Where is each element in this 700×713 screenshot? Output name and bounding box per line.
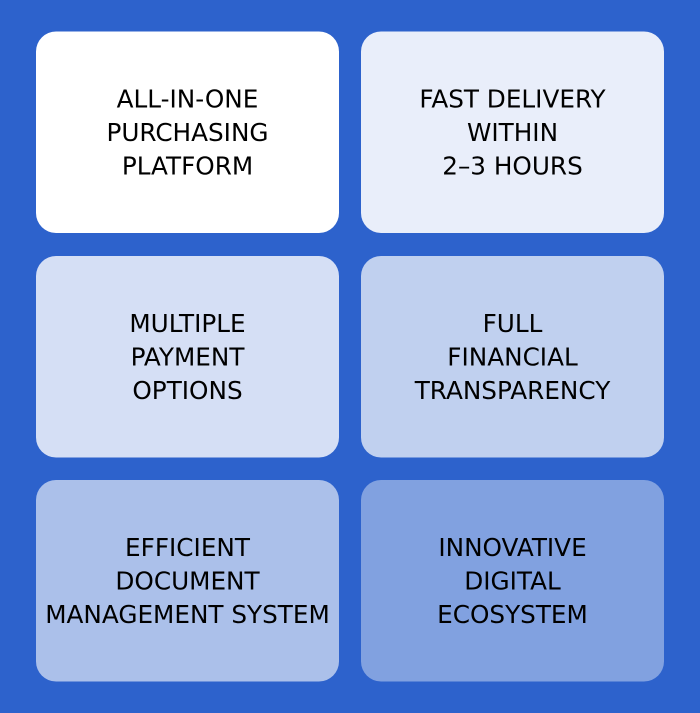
panel: all-in-one purchasing platform: [36, 32, 339, 233]
panel: multiple payment options: OPTIONS: [132, 376, 243, 405]
panel: full financial transparency: TRANSPARENCY: [414, 376, 611, 405]
panel: innovative digital ecosystem: INNOVATIVE: [438, 533, 587, 562]
panel: fast delivery within 2–3 hours: FAST DELIVERY: [419, 84, 607, 114]
panel: fast delivery within 2–3 hours: [361, 32, 664, 233]
panel: all-in-one purchasing platform: PLATFORM: [122, 152, 253, 180]
panel: efficient document management system: EFFICIENT: [125, 533, 251, 562]
panel: innovative digital ecosystem: ECOSYSTEM: [437, 600, 588, 629]
panel: all-in-one purchasing platform: PURCHASING: [106, 118, 269, 147]
panel: innovative digital ecosystem: [361, 480, 664, 682]
panel: fast delivery within 2–3 hours: 2–3 HOURS: [442, 152, 583, 180]
panel: innovative digital ecosystem: DIGITAL: [464, 566, 561, 596]
panel: efficient document management system: DOCUMENT: [115, 566, 261, 596]
panel: efficient document management system: [36, 480, 339, 682]
panel: efficient document management system: MANAGEMENT SYSTEM: [45, 600, 330, 629]
panel: full financial transparency: FULL: [483, 309, 543, 338]
panel: full financial transparency: FINANCIAL: [447, 342, 578, 372]
panel: full financial transparency: [361, 256, 664, 458]
panel: multiple payment options: [36, 256, 339, 458]
panel: fast delivery within 2–3 hours: WITHIN: [467, 118, 558, 147]
panel: all-in-one purchasing platform: ALL-IN-ONE: [117, 84, 258, 114]
panel: multiple payment options: PAYMENT: [131, 342, 245, 372]
panel: multiple payment options: MULTIPLE: [129, 309, 246, 338]
